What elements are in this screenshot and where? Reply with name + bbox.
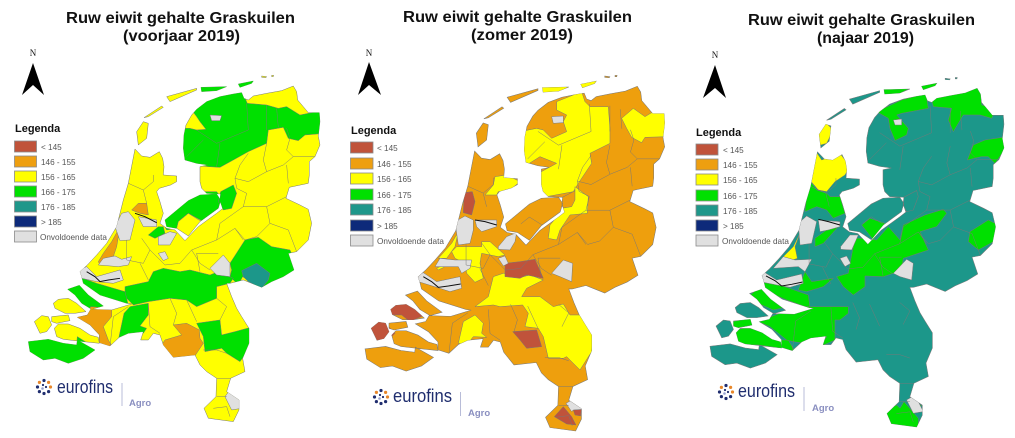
legend: < 145 bbox=[41, 143, 62, 152]
logo: eurofins: eurofins bbox=[738, 381, 795, 401]
panel: zomer 2019 bbox=[350, 9, 668, 431]
legend: Onvoldoende data bbox=[377, 237, 444, 246]
legend: 156 - 165 bbox=[377, 175, 412, 184]
legend: 166 - 175 bbox=[723, 192, 758, 201]
title: voorjaar bbox=[66, 10, 295, 45]
map: najaar bbox=[710, 78, 1007, 428]
icon: north arrow bbox=[703, 50, 726, 98]
legend: < 145 bbox=[377, 144, 398, 153]
title: najaar bbox=[748, 12, 975, 47]
logo: eurofins: Agro bbox=[468, 408, 490, 419]
legend bbox=[696, 127, 789, 246]
title: najaar: (najaar 2019) bbox=[817, 30, 914, 47]
logo: eurofins: eurofins bbox=[393, 386, 452, 406]
map: zomer bbox=[365, 75, 668, 431]
legend: Onvoldoende data bbox=[40, 233, 107, 242]
logo: eurofins: Agro bbox=[129, 398, 151, 409]
icon: north arrow: N bbox=[712, 50, 719, 60]
icon: north arrow: N bbox=[30, 48, 37, 58]
legend: 176 - 185 bbox=[377, 206, 412, 215]
title: voorjaar: (voorjaar 2019) bbox=[123, 28, 240, 45]
legend: > 185 bbox=[723, 222, 744, 231]
logo: eurofins: eurofins bbox=[57, 377, 113, 397]
icon: north arrow: N bbox=[366, 48, 373, 58]
legend: 156 - 165 bbox=[723, 176, 758, 185]
legend: 176 - 185 bbox=[41, 203, 76, 212]
title: voorjaar: Ruw eiwit gehalte Graskuilen bbox=[66, 10, 295, 27]
logo: eurofins: Agro bbox=[812, 403, 834, 414]
legend: 166 - 175 bbox=[41, 188, 76, 197]
title: najaar: Ruw eiwit gehalte Graskuilen bbox=[748, 12, 975, 29]
legend: 176 - 185 bbox=[723, 207, 758, 216]
legend: 146 - 155 bbox=[723, 161, 758, 170]
logo: eurofins bbox=[373, 386, 490, 419]
legend: Legenda bbox=[696, 127, 742, 139]
title: zomer bbox=[403, 9, 632, 44]
logo: eurofins bbox=[718, 381, 834, 414]
legend bbox=[14, 123, 107, 242]
title: zomer: (zomer 2019) bbox=[471, 27, 573, 44]
legend: Onvoldoende data bbox=[722, 237, 789, 246]
map: voorjaar bbox=[25, 75, 325, 422]
legend: 156 - 165 bbox=[41, 173, 76, 182]
logo: eurofins bbox=[36, 377, 151, 409]
title: zomer: Ruw eiwit gehalte Graskuilen bbox=[403, 9, 632, 26]
legend: > 185 bbox=[377, 222, 398, 231]
icon: north arrow bbox=[22, 48, 44, 95]
legend: > 185 bbox=[41, 218, 62, 227]
legend: Legenda bbox=[351, 125, 397, 137]
legend: Legenda bbox=[15, 123, 61, 135]
legend: 166 - 175 bbox=[377, 191, 412, 200]
legend: < 145 bbox=[723, 146, 744, 155]
panel: voorjaar 2019 bbox=[14, 10, 325, 422]
icon: north arrow bbox=[358, 48, 381, 95]
legend: 146 - 155 bbox=[41, 158, 76, 167]
panel: najaar 2019 bbox=[696, 12, 1007, 428]
legend bbox=[350, 125, 444, 246]
legend: 146 - 155 bbox=[377, 160, 412, 169]
